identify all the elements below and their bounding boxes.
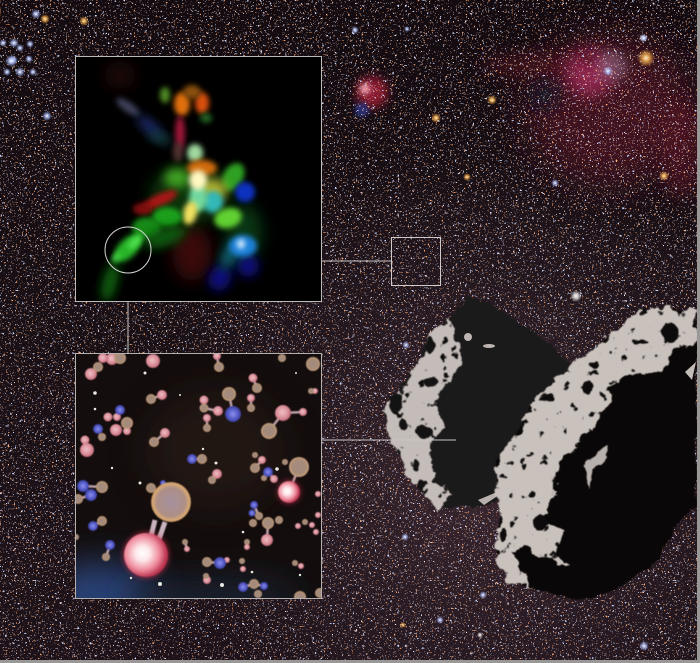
pink atoms [80,352,321,584]
nebula: large red cloud upper right [480,35,700,200]
large molecule [123,482,191,578]
dust specks [93,372,301,587]
molecule bonds [78,357,303,587]
molecules [73,352,325,603]
comet [385,296,696,600]
highlight circle [105,227,151,273]
comet: left lobe [385,296,573,507]
sample region box [392,238,440,286]
blue atoms [77,405,273,592]
panel: emission map [75,56,322,303]
bright atom [277,480,301,504]
nebula: small red cloud [355,76,388,117]
colored emission clouds [98,61,262,303]
panel: molecules [75,353,322,599]
panel backdrop glow [76,396,298,598]
tan atoms [73,352,325,603]
comet: right lobe [497,308,696,600]
connector lines [128,261,456,440]
